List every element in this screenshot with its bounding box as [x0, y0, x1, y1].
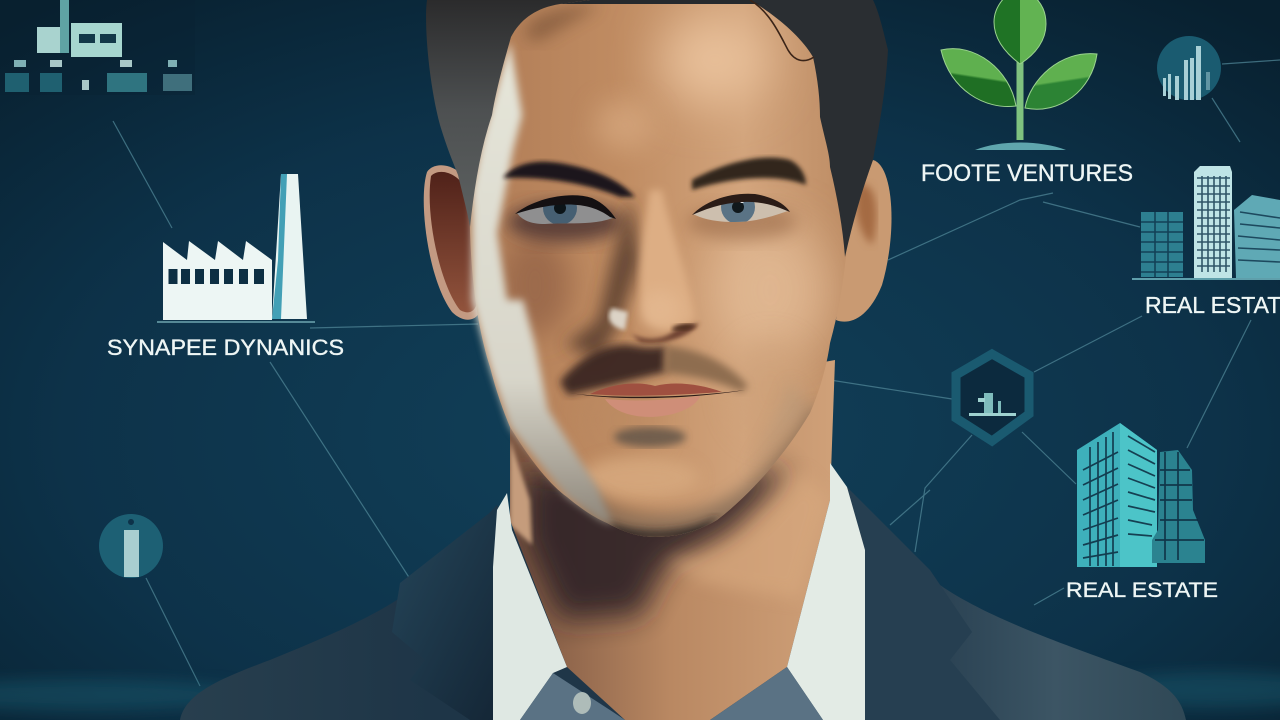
moustache dark side	[560, 345, 666, 395]
eyebrows	[503, 158, 806, 197]
shirt collars	[493, 463, 865, 720]
icon: top left factory	[0, 0, 195, 95]
label: Synapee Dynamics: SYNAPEE DYNANICS	[107, 335, 344, 360]
chin shadow	[614, 427, 686, 447]
neck	[510, 360, 835, 720]
stubble jaw band	[580, 405, 830, 545]
face shading	[500, 5, 830, 545]
hair	[426, 0, 888, 257]
pale lit stripe	[472, 42, 613, 525]
icon: top right circle chart	[1157, 36, 1221, 100]
icon: real estate towers bottom	[1077, 423, 1205, 567]
jacket	[180, 487, 1186, 720]
icon: small circle pillar	[99, 514, 163, 578]
face	[470, 0, 848, 537]
icon: plant	[941, 0, 1097, 150]
icon: hexagon	[956, 354, 1029, 441]
ears	[424, 160, 892, 322]
nose	[609, 308, 700, 343]
eyes	[515, 194, 790, 224]
mouth	[570, 383, 745, 417]
label: Real Estate bottom: REAL ESTATE	[1066, 578, 1218, 602]
floor glow	[0, 672, 1280, 711]
moustache stubble side	[664, 346, 748, 392]
neck shading	[510, 440, 830, 620]
icon: real estate towers top	[1132, 166, 1280, 279]
icon: factory	[157, 174, 315, 322]
network connector lines	[113, 60, 1280, 686]
loose hair strand	[750, 0, 814, 61]
person	[180, 0, 1186, 720]
jacket lapels	[392, 487, 1000, 720]
label: Foote Ventures: FOOTE VENTURES	[921, 160, 1133, 187]
